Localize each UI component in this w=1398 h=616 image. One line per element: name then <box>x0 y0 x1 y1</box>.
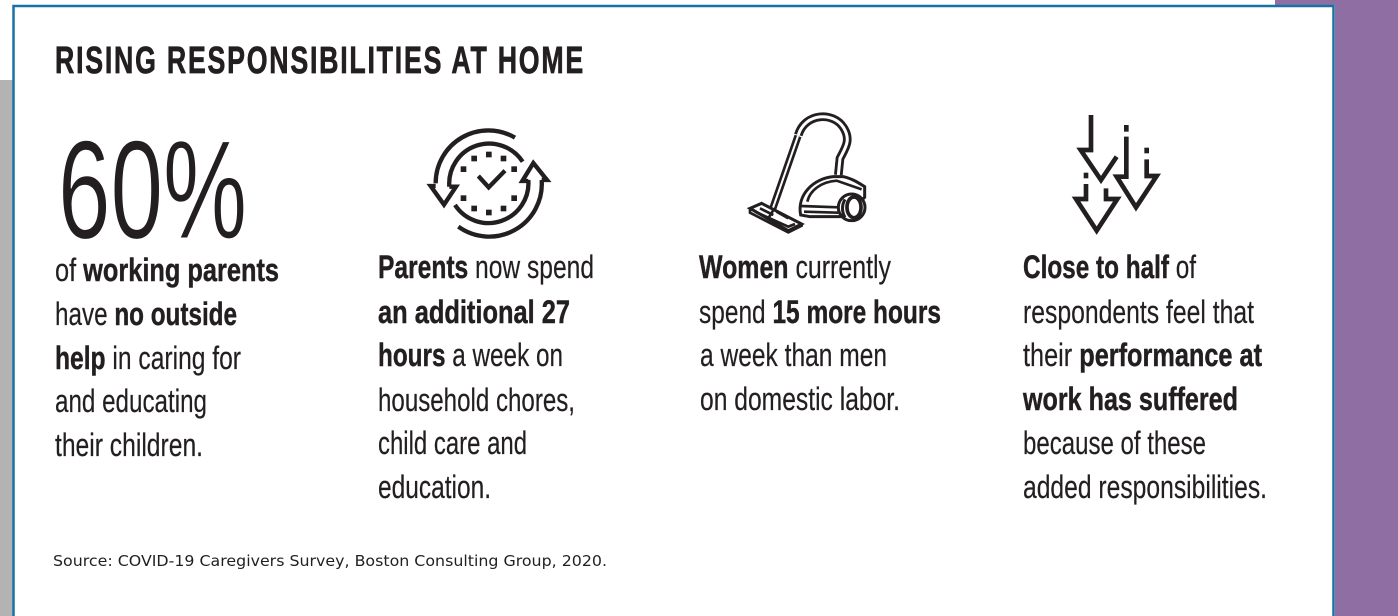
text block: close to half: because of these <box>1023 425 1206 461</box>
text block: parents additional hours: Parents now spend <box>378 249 594 285</box>
column: work performance <box>1022 115 1267 505</box>
text block: close to half: Close to half of <box>1023 249 1196 285</box>
text block: working parents: of working parents <box>55 252 279 288</box>
icon: vacuum cleaner <box>750 117 865 232</box>
big number: 60%: 60% <box>58 111 247 268</box>
text block: working parents: and educating <box>55 383 207 419</box>
text block: women hours: Women currently <box>699 249 891 285</box>
column: additional hours <box>378 130 594 505</box>
text block: close to half: respondents feel that <box>1023 294 1254 330</box>
text block: parents additional hours <box>378 249 594 505</box>
text block: close to half: work has suffered <box>1022 381 1238 417</box>
background: grey block at left <box>0 80 13 616</box>
text block: close to half <box>1022 249 1267 505</box>
text block: working parents: their children. <box>55 427 203 463</box>
text block: working parents: help in caring for <box>55 340 241 376</box>
text block: parents additional hours: hours a week on <box>378 337 563 373</box>
text block: women hours <box>699 249 941 417</box>
text block: working parents: have no outside <box>55 296 237 332</box>
text block: close to half: their performance at <box>1023 337 1262 373</box>
title: RISING RESPONSIBILITIES AT HOME <box>55 40 585 82</box>
text block: working parents <box>55 252 279 463</box>
source note: Source: COVID-19 Caregivers Survey, Boston Consulting Group, 2020. <box>53 552 607 570</box>
text block: women hours: spend 15 more hours <box>699 294 941 330</box>
text block: parents additional hours: an additional 27 <box>378 294 570 330</box>
text block: parents additional hours: education. <box>378 469 491 505</box>
text block: women hours: on domestic labor. <box>700 381 900 417</box>
text block: close to half: added responsibilities. <box>1023 469 1267 505</box>
icon: falling arrows <box>1076 115 1157 231</box>
column: domestic labor <box>699 117 941 417</box>
column: 60 percent statistic <box>55 111 279 463</box>
text block: parents additional hours: household chores, <box>378 382 575 418</box>
icon: clock with circular arrows <box>431 130 547 237</box>
text block: women hours: a week than men <box>700 337 887 373</box>
background: purple block at right <box>1275 0 1398 616</box>
text block: parents additional hours: child care and <box>378 425 527 461</box>
